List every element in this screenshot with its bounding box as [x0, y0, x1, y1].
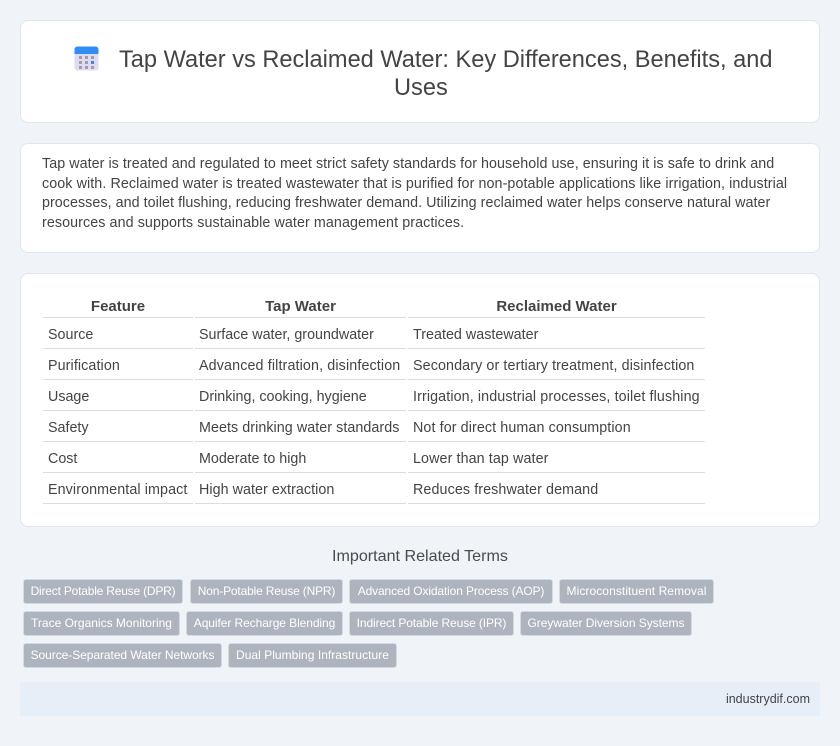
- text block: summary: processes, and toilet flushing, reducing freshwater demand. Utilizing reclaimed water helps conserve natural water: [42, 195, 770, 211]
- comparison table: Not for direct human consumption: [413, 420, 631, 436]
- tag list: Aquifer Recharge Blending: [194, 616, 335, 630]
- comparison table: Lower than tap water: [413, 451, 549, 467]
- footer: [20, 682, 820, 716]
- tag list: Advanced Oxidation Process (AOP): [358, 584, 544, 598]
- tag list: Direct Potable Reuse (DPR): [31, 584, 175, 598]
- comparison table: Source: [48, 327, 93, 343]
- panel: table card: [20, 273, 820, 527]
- comparison table: Usage: [48, 389, 89, 405]
- tag list: Microconstituent Removal: [566, 584, 706, 598]
- comparison table: Feature: [91, 298, 145, 315]
- footer text: industrydif.com: [726, 692, 810, 706]
- comparison table: Treated wastewater: [413, 327, 538, 343]
- comparison table: [43, 298, 705, 504]
- title: [119, 47, 772, 101]
- comparison table: Purification: [48, 358, 120, 374]
- panel: title card: [20, 20, 820, 123]
- title: Uses: [394, 75, 448, 101]
- comparison table: Meets drinking water standards: [199, 420, 399, 436]
- comparison table: High water extraction: [199, 482, 334, 498]
- comparison table: Surface water, groundwater: [199, 327, 374, 343]
- comparison table: Reclaimed Water: [496, 298, 617, 315]
- tag list: [23, 579, 714, 668]
- icon: calendar: [74, 46, 98, 70]
- text block: summary: Tap water is treated and regulated to meet strict safety standards for household use, ensuring it is safe to drink and: [42, 156, 774, 172]
- heading: related terms: Important Related Terms: [332, 547, 508, 565]
- comparison table: Environmental impact: [48, 482, 187, 498]
- text block: summary: [42, 156, 787, 231]
- comparison table: Irrigation, industrial processes, toilet flushing: [413, 389, 700, 405]
- comparison table: Drinking, cooking, hygiene: [199, 389, 367, 405]
- tag list: Indirect Potable Reuse (IPR): [357, 616, 506, 630]
- comparison table: Safety: [48, 420, 89, 436]
- comparison table: Reduces freshwater demand: [413, 482, 598, 498]
- panel: summary card: [20, 143, 820, 253]
- comparison table: Advanced filtration, disinfection: [199, 358, 400, 374]
- comparison table: Cost: [48, 451, 77, 467]
- comparison table: Secondary or tertiary treatment, disinfection: [413, 358, 694, 374]
- tag list: Trace Organics Monitoring: [31, 616, 172, 630]
- comparison table: Tap Water: [265, 298, 336, 315]
- text block: summary: resources and supports sustainable water management practices.: [42, 215, 464, 231]
- title: Tap Water vs Reclaimed Water: Key Differences, Benefits, and: [119, 47, 772, 73]
- comparison table: Moderate to high: [199, 451, 306, 467]
- tag list: Dual Plumbing Infrastructure: [236, 648, 389, 662]
- tag list: Non-Potable Reuse (NPR): [198, 584, 335, 598]
- tag list: Greywater Diversion Systems: [528, 616, 684, 630]
- text block: summary: cook with. Reclaimed water is treated wastewater that is purified for non-potable applications like irrigation, industrial: [42, 176, 787, 192]
- tag list: Source-Separated Water Networks: [31, 648, 214, 662]
